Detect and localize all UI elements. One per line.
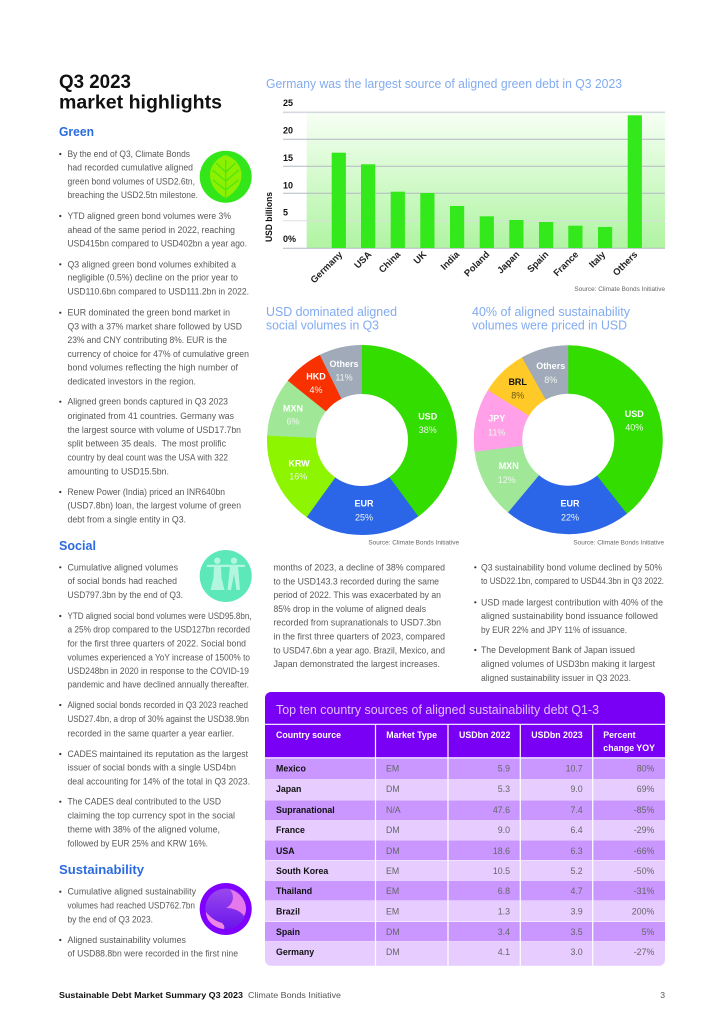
bullet: Q3 green volumes: Q3 aligned green bond volumes exhibited a — [68, 259, 236, 269]
bullet: YTD social: YTD aligned social bond volumes were USD95.8bn, — [68, 611, 252, 621]
donut chart: 4% — [309, 385, 323, 395]
bullet: EUR dominance: EUR dominated the green bond market in — [68, 308, 230, 318]
donut chart: 8% — [511, 391, 524, 401]
bar chart: USD billions — [264, 192, 274, 242]
bullet: first nine months: months of 2023, a decline of 38% compared — [274, 562, 445, 572]
bullet: Q3 social: USD27.4bn, a drop of 30% against the USD38.9bn — [68, 714, 249, 724]
donut chart: 11% — [488, 427, 505, 437]
row: South Korea: South Korea — [276, 866, 328, 876]
panel: bar chart by country — [264, 76, 665, 293]
row: Spain: 5% — [642, 927, 654, 937]
title: Q3 2023 — [59, 71, 131, 93]
row: Mexico: 80% — [637, 764, 654, 774]
heading: green: Green — [59, 124, 94, 139]
bullet: Q3 sustainability — [474, 562, 664, 586]
bullet: countries — [59, 397, 241, 476]
donut chart: MXN — [499, 461, 519, 471]
bullet: CADES currency: theme with 38% of the aligned volume, — [68, 824, 220, 834]
row: France: France — [276, 825, 305, 835]
bullet: YTD social: for the first three quarters of 2022. Social bond — [68, 638, 246, 648]
bullet: EUR dominance: currency of choice for 47% of cumulative green — [68, 349, 249, 359]
row: South Korea: 5.2 — [570, 866, 583, 876]
row: Mexico: Mexico — [276, 764, 306, 774]
bullet: Development Bank of Japan: aligned volumes of USD3bn making it largest — [481, 659, 656, 669]
bullet: cumulative social — [59, 562, 183, 600]
bullet: cumulative social: of social bonds had reached — [68, 576, 177, 586]
title — [59, 71, 222, 114]
row: USA: DM — [386, 846, 400, 856]
row: South Korea: EM — [386, 866, 399, 876]
row: South Korea — [276, 866, 654, 876]
bullet: CADES reputation: deal accounting for 14% of the total in Q3 2023. — [68, 776, 250, 786]
bullet: Q3 green volumes: USD110.6bn compared to USD111.2bn in 2022. — [68, 287, 249, 297]
row: Supranational: 7.4 — [570, 805, 583, 815]
table rows — [265, 758, 665, 966]
footer: Sustainable Debt Market Summary Q3 2023 — [59, 990, 243, 1000]
bullet: cumulative green volumes — [59, 149, 198, 200]
donut chart: 11% — [335, 373, 353, 383]
row: France: 6.4 — [570, 825, 583, 835]
bullet: Renew Power: debt from a single entity in Q3. — [68, 514, 186, 524]
bullet: Q3 social — [59, 700, 249, 738]
bullet: EUR dominance: 23% and CNY contributing 8%. EUR is the — [68, 335, 227, 345]
donut chart: HKD — [306, 372, 326, 382]
table header: Percent — [603, 730, 636, 740]
row: Japan: 5.3 — [498, 784, 510, 794]
donut chart: KRW — [288, 458, 310, 468]
chart title — [472, 304, 630, 332]
bullet: CADES currency: The CADES deal contributed to the USD — [68, 797, 221, 807]
bar chart: USA — [352, 248, 374, 270]
bullet: CADES currency: followed by EUR 25% and KRW 16%. — [68, 838, 208, 848]
donut chart: 40% — [625, 423, 643, 433]
bar chart: Japan — [494, 248, 522, 276]
row: Thailand: Thailand — [276, 886, 312, 896]
donut chart — [263, 341, 461, 539]
donut chart: USD — [625, 409, 644, 419]
chart title: Germany was the largest source of aligned green debt in Q3 2023 — [266, 76, 622, 91]
bullet: EUR dominance: Q3 with a 37% market share followed by USD — [68, 322, 242, 332]
bullet: CADES reputation: CADES maintained its reputation as the largest — [68, 749, 249, 759]
row: USA: 6.3 — [570, 846, 583, 856]
row: USA: -66% — [634, 846, 654, 856]
bullet: EUR dominance: dedicated investors in the region. — [68, 376, 196, 386]
bullet: cumulative social: Cumulative aligned volumes — [68, 562, 179, 572]
panel: top ten country table — [265, 692, 665, 966]
bullet: cumulative sustainability: volumes had reached USD762.7bn — [68, 900, 195, 910]
row: Germany: DM — [386, 947, 400, 957]
donut chart: 25% — [355, 512, 373, 522]
bullet: countries: amounting to USD15.5bn. — [68, 466, 169, 476]
row: Supranational: -85% — [634, 805, 654, 815]
row: Mexico — [276, 764, 654, 774]
row: Spain: Spain — [276, 927, 300, 937]
row: Spain: 3.5 — [570, 927, 583, 937]
bullet: cumulative green volumes: had recorded cumulative aligned — [68, 163, 193, 173]
bullet: cumulative green volumes: breaching the USD2.5tn milestone. — [68, 190, 198, 200]
bullet: Q3 green volumes — [59, 259, 249, 297]
row: Brazil — [276, 906, 654, 916]
bullet: USD contribution — [474, 597, 663, 635]
row: Germany: 3.0 — [570, 947, 583, 957]
bullet: USD contribution: USD made largest contribution with 40% of the — [481, 597, 663, 607]
row: South Korea: 10.5 — [493, 866, 510, 876]
source note: Source: Climate Bonds Initiative — [368, 540, 459, 546]
bullet: YTD social: USD248bn in 2020 in response to the COVID-19 — [68, 666, 249, 676]
icon: swirl — [200, 883, 252, 935]
row: Supranational: Supranational — [276, 805, 335, 815]
row: Germany — [276, 947, 654, 957]
bullet: YTD green volumes — [59, 211, 247, 249]
panel: sustainability highlights — [59, 562, 664, 958]
bullet: YTD social: volumes experienced a YoY increase of 1500% to — [68, 652, 250, 662]
row: France: 9.0 — [498, 825, 510, 835]
bullet: YTD green volumes: ahead of the same period in 2022, reaching — [68, 225, 235, 235]
bullet: countries: split between 35 deals. The most prolific — [68, 439, 227, 449]
bullet: Q3 social: recorded in the same quarter a year earlier. — [68, 728, 234, 738]
heading: social: Social — [59, 538, 96, 553]
donut chart: 22% — [561, 512, 579, 522]
donut chart: MXN — [283, 403, 303, 413]
row: Thailand: EM — [386, 886, 399, 896]
table header: Market Type — [386, 730, 437, 740]
row: Supranational: N/A — [386, 805, 401, 815]
row: Brazil: 1.3 — [498, 906, 510, 916]
bullet: Q3 social: Aligned social bonds recorded in Q3 2023 reached — [68, 700, 248, 710]
donut chart: USD — [418, 412, 438, 422]
footer — [59, 990, 665, 1000]
bar chart: 20 — [283, 126, 293, 136]
bullet: USD contribution: by EUR 22% and JPY 11% of issuance. — [481, 625, 627, 635]
row: Thailand — [276, 886, 654, 896]
bullet: first nine months: of USD88.8bn were recorded in the first nine — [68, 948, 238, 958]
bar chart: Others — [610, 249, 639, 278]
row: France: -29% — [634, 825, 654, 835]
row: France — [276, 825, 654, 835]
bullet: YTD social: pandemic and have declined annually thereafter. — [68, 680, 249, 690]
bullet: cumulative sustainability: Cumulative aligned sustainability — [68, 887, 197, 897]
bullet: first nine months: 85% drop in the volume of aligned deals — [274, 604, 427, 614]
bullet: first nine months — [59, 562, 445, 958]
bullet: Q3 sustainability: Q3 sustainability bond volume declined by 50% — [481, 562, 662, 572]
bullet: countries: the largest source with volume of USD17.7bn — [68, 425, 241, 435]
bullet: YTD social — [59, 611, 252, 690]
donut chart: EUR — [354, 498, 374, 508]
bar chart: 15 — [283, 153, 293, 163]
row: USA — [276, 846, 654, 856]
row: Spain: 3.4 — [498, 927, 510, 937]
chart title: volumes were priced in USD — [472, 318, 627, 332]
bar chart: Spain — [525, 248, 551, 274]
row: Germany: -27% — [634, 947, 654, 957]
bullet: YTD social: a 25% drop compared to the USD127bn recorded — [68, 625, 250, 635]
table header: USDbn 2023 — [531, 730, 583, 740]
bullet: Renew Power — [59, 487, 241, 524]
bullet: first nine months: to USD47.6bn a year ago. Brazil, Mexico, and — [274, 645, 445, 655]
row: Japan: 9.0 — [570, 784, 583, 794]
bullet: countries: Aligned green bonds captured in Q3 2023 — [68, 397, 228, 407]
row: Germany: Germany — [276, 947, 314, 957]
row: Japan: Japan — [276, 784, 301, 794]
panel: sustainability currency donut — [469, 304, 667, 546]
table header: USDbn 2022 — [459, 730, 510, 740]
bullet: CADES currency: claiming the top currency spot in the social — [68, 811, 235, 821]
panel: green highlights — [59, 124, 252, 524]
bar chart: 5 — [283, 208, 288, 218]
bullet: Renew Power: Renew Power (India) priced an INR640bn — [68, 487, 225, 497]
chart title — [266, 304, 397, 332]
row: Japan — [276, 784, 654, 794]
row: France: DM — [386, 825, 400, 835]
row: Brazil: 3.9 — [570, 906, 583, 916]
row: Mexico: 10.7 — [566, 764, 583, 774]
icon: leaf — [200, 151, 252, 203]
bullet: cumulative social: USD797.3bn by the end of Q3. — [68, 590, 183, 600]
title: market highlights — [59, 92, 222, 114]
chart title: social volumes in Q3 — [266, 318, 379, 332]
bullet: Q3 green volumes: negligible (0.5%) decline on the prior year to — [68, 273, 238, 283]
bullet: CADES currency — [59, 797, 235, 848]
donut chart: 8% — [544, 375, 557, 385]
bullet: cumulative green volumes: green bond volumes of USD2.6tn, — [68, 177, 195, 187]
bullet: Development Bank of Japan: The Development Bank of Japan issued — [481, 645, 635, 655]
bullet: first nine months: to the USD143.3 recorded during the same — [274, 577, 439, 587]
footer: 3 — [660, 990, 665, 1000]
bullet: CADES reputation: issuer of social bonds with a single USD4bn — [68, 763, 236, 773]
bullet: EUR dominance: bond volumes reflecting the high number of — [68, 363, 239, 373]
chart title: 40% of aligned sustainability — [472, 304, 630, 319]
bullet: countries: country by deal count was the USA with 322 — [68, 452, 228, 462]
row: Thailand: -31% — [634, 886, 654, 896]
icon: two figures — [200, 550, 252, 602]
panel: social currency donut — [263, 304, 461, 546]
row: USA: 18.6 — [493, 846, 510, 856]
table header: Country source — [276, 730, 341, 740]
bar chart: 10 — [283, 180, 293, 190]
source note: Source: Climate Bonds Initiative — [573, 540, 664, 546]
table title band — [265, 692, 665, 758]
bullet: USD contribution: aligned sustainability bond issuance followed — [481, 611, 658, 621]
footer: Climate Bonds Initiative — [248, 990, 341, 1000]
heading: sustainability: Sustainability — [59, 862, 145, 877]
panel: social highlights — [59, 538, 252, 848]
bullet: YTD green volumes: USD415bn compared to USD402bn a year ago. — [68, 239, 247, 249]
bar chart: France — [551, 249, 580, 278]
bullet: Development Bank of Japan: aligned sustainability issuer in Q3 2023. — [481, 673, 631, 683]
table title band: Top ten country sources of aligned sustainability debt Q1-3 — [276, 702, 599, 717]
column dividers and header rule — [265, 724, 665, 966]
bar chart: Italy — [586, 248, 608, 270]
row: Mexico: 5.9 — [498, 764, 510, 774]
bullet: first nine months: in the first three quarters of 2023, compared — [274, 631, 445, 641]
row: Japan: DM — [386, 784, 400, 794]
bar chart: 0% — [283, 234, 296, 244]
donut chart — [469, 341, 667, 539]
donut chart: Others — [329, 359, 359, 369]
bullet: first nine months: recorded from supranationals to USD7.3bn — [274, 618, 441, 628]
donut chart: JPY — [488, 413, 505, 423]
bullet: countries: originated from 41 countries. Germany was — [68, 411, 235, 421]
bar chart — [264, 98, 665, 285]
row: USA: USA — [276, 846, 295, 856]
row: Thailand: 4.7 — [570, 886, 583, 896]
donut chart: 6% — [286, 417, 300, 427]
bar chart: China — [376, 248, 403, 275]
bullet: Development Bank of Japan — [474, 645, 656, 683]
row: Germany: 4.1 — [498, 947, 510, 957]
row: Supranational: 47.6 — [493, 805, 510, 815]
bullet: EUR dominance — [59, 308, 249, 386]
bar chart: Germany — [308, 248, 345, 285]
bullet: first nine months: Aligned sustainability volumes — [68, 935, 187, 945]
bullet: first nine months: period of 2022. This was exacerbated by an — [274, 590, 441, 600]
chart title: USD dominated aligned — [266, 304, 397, 319]
row: Spain: DM — [386, 927, 400, 937]
bar chart: 25 — [283, 98, 293, 108]
row: Spain — [276, 927, 654, 937]
bullet: cumulative sustainability: by the end of Q3 2023. — [68, 914, 153, 924]
bullet: Q3 sustainability: to USD22.1bn, compared to USD44.3bn in Q3 2022. — [481, 576, 664, 586]
bullet: cumulative green volumes: By the end of Q3, Climate Bonds — [68, 149, 191, 159]
table header — [276, 730, 655, 753]
donut chart: 12% — [498, 475, 516, 485]
bar chart: UK — [411, 248, 429, 266]
row: South Korea: -50% — [634, 866, 654, 876]
bullet: cumulative sustainability — [59, 887, 197, 924]
bar chart: Poland — [462, 248, 492, 279]
bar chart: India — [438, 248, 462, 272]
row: Thailand: 6.8 — [498, 886, 510, 896]
bullet: Renew Power: (USD7.8bn) loan, the largest volume of green — [68, 501, 241, 511]
donut chart: BRL — [508, 377, 527, 387]
table header: change YOY — [603, 743, 655, 753]
bullet: first nine months: Japan demonstrated the largest increases. — [274, 659, 440, 669]
donut chart: EUR — [560, 498, 580, 508]
row: Supranational — [276, 805, 654, 815]
bullet: YTD green volumes: YTD aligned green bond volumes were 3% — [68, 211, 231, 221]
donut chart: 38% — [419, 425, 437, 435]
row: Japan: 69% — [637, 784, 654, 794]
row: Mexico: EM — [386, 764, 399, 774]
source note: Source: Climate Bonds Initiative — [574, 286, 665, 293]
row: Brazil: 200% — [632, 906, 654, 916]
row: Brazil: Brazil — [276, 906, 300, 916]
donut chart: 16% — [289, 472, 307, 482]
row: Brazil: EM — [386, 906, 399, 916]
bullet: CADES reputation — [59, 749, 250, 786]
donut chart: Others — [536, 361, 565, 371]
